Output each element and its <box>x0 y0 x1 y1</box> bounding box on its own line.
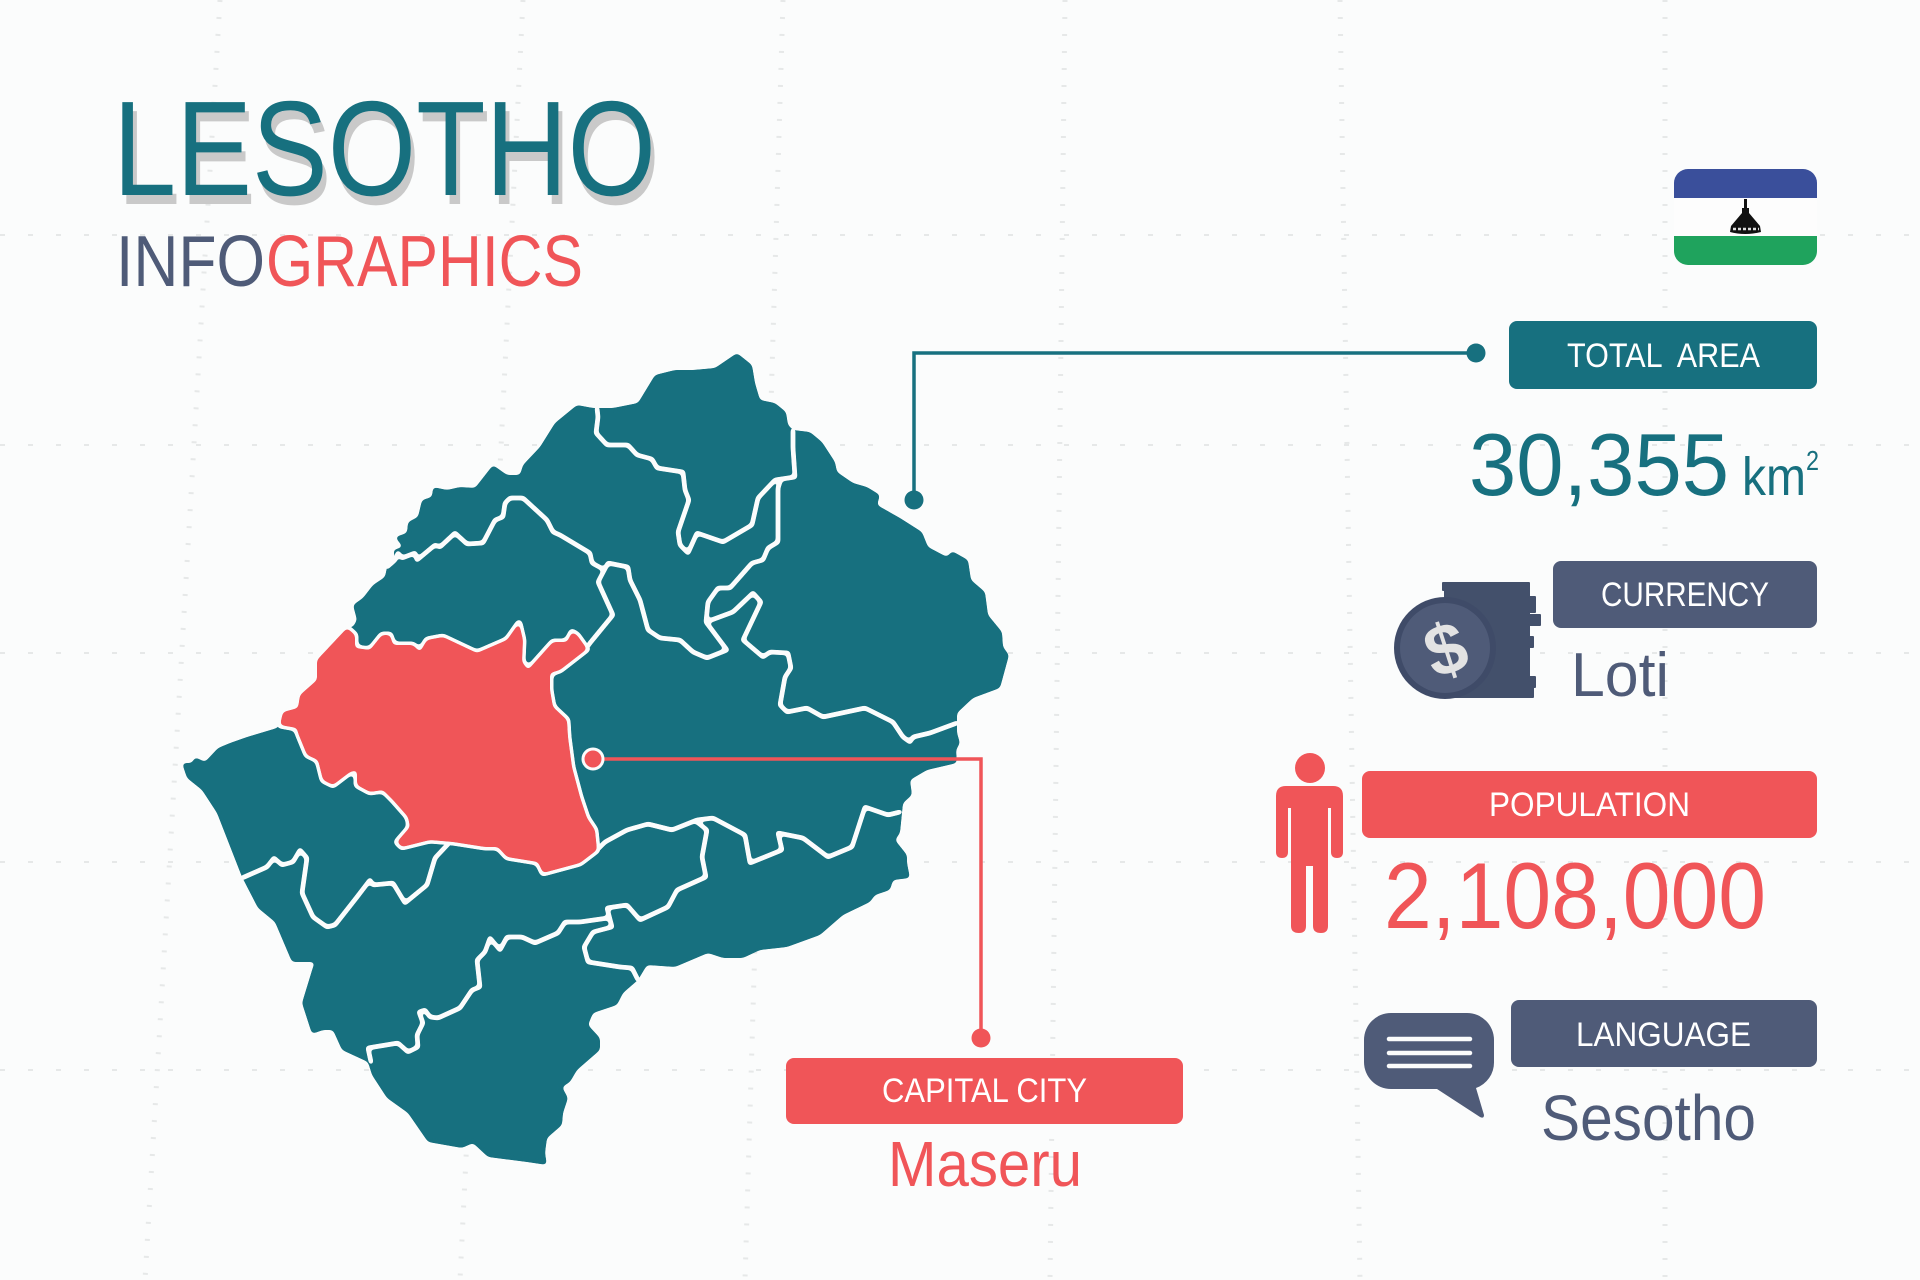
badge: total area <box>1509 321 1817 389</box>
icon: person <box>1276 753 1343 933</box>
value: capital city: Maseru <box>888 1128 1082 1200</box>
panel: population <box>1276 753 1817 948</box>
value: total area: km <box>1742 447 1806 507</box>
panel: capital city <box>786 1058 1183 1200</box>
icon: speech bubble <box>1364 1013 1494 1118</box>
connector: total area <box>904 344 1486 510</box>
icon: coins: $ <box>1415 606 1477 694</box>
value: total area: 30,355 <box>1469 415 1729 514</box>
badge: capital city: CAPITAL CITY <box>882 1072 1087 1110</box>
panel: language <box>1364 1000 1817 1154</box>
title: LESOTHO: LESOTHO <box>113 73 656 224</box>
value: population: 2,108,000 <box>1384 843 1766 948</box>
map: country regions <box>182 353 1009 1165</box>
value: currency: Loti <box>1571 641 1669 710</box>
map: capital region highlighted <box>280 623 597 873</box>
badge: language: LANGUAGE <box>1576 1016 1751 1054</box>
subtitle: INFOGRAPHICS: GRAPHICS <box>266 222 583 302</box>
icon: Lesotho flag <box>1674 169 1817 265</box>
badge: currency <box>1553 561 1817 628</box>
value: total area: 2 <box>1806 445 1819 476</box>
badge: language <box>1511 1000 1817 1067</box>
subtitle: INFOGRAPHICS: INFO <box>116 222 265 302</box>
badge: population <box>1362 771 1817 838</box>
panel: total area <box>1469 321 1819 514</box>
subtitle: INFOGRAPHICS <box>116 222 583 302</box>
badge: total area: TOTAL AREA <box>1567 337 1760 375</box>
panel: currency <box>1394 561 1817 710</box>
badge: currency: CURRENCY <box>1601 576 1769 614</box>
badge: capital city <box>786 1058 1183 1124</box>
connector: capital city <box>583 749 990 1048</box>
map of Lesotho <box>182 353 1009 1165</box>
icon: coins <box>1394 583 1540 699</box>
value: language: Sesotho <box>1541 1082 1756 1154</box>
map: region borders <box>242 408 957 1062</box>
badge: population: POPULATION <box>1489 786 1690 824</box>
